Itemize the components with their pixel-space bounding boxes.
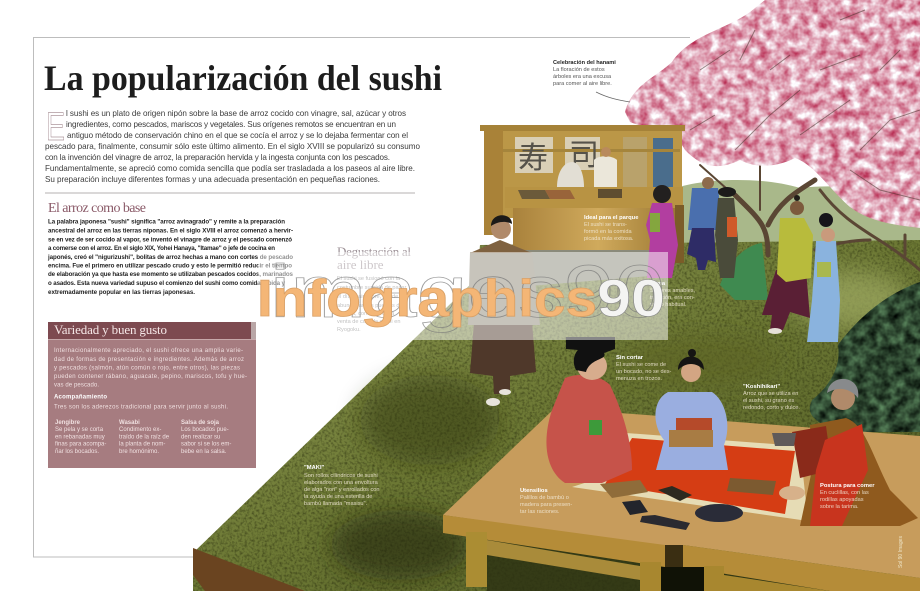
cherry blossom canopy bbox=[625, 0, 920, 228]
callout: Sin cortar bbox=[616, 355, 671, 382]
section: Degustación al aire libre: abundaban los puestos de bbox=[337, 303, 403, 309]
figure: seated woman with grey hair bbox=[779, 379, 918, 526]
watermark white numerals: 90 bbox=[597, 270, 665, 328]
drop cap: E bbox=[46, 105, 65, 149]
watermark orange text: Infographics bbox=[257, 270, 597, 328]
callout: Ideal para el parque: Ideal para el parque bbox=[584, 215, 639, 221]
callout: Maki: elaborados con una envoltura bbox=[304, 480, 379, 486]
intro text block: antiguo método de conservación chino en el que se cocía el arroz y se lo dejaba fermentar con el bbox=[67, 131, 408, 140]
credit: Sol 90 Images bbox=[898, 536, 904, 568]
figure: woman in magenta kimono bbox=[646, 185, 678, 278]
hills bbox=[670, 180, 920, 270]
column: Salsa de soja: bebe en la salsa. bbox=[181, 449, 227, 455]
column: Wasabi: Condimento ex- bbox=[119, 427, 161, 433]
callout: hanami bbox=[553, 60, 630, 102]
panel header bbox=[48, 322, 251, 339]
deck top bbox=[443, 408, 920, 578]
watermark band bbox=[257, 250, 668, 340]
column: Jengibre: Se pela y se corta bbox=[55, 427, 104, 433]
callout: Ideal para el parque: El sushi se trans- bbox=[584, 222, 627, 228]
panel heading: Variedad y buen gusto bbox=[54, 322, 167, 337]
figure: woman in light blue kimono bbox=[807, 213, 840, 342]
callout: Maki: de alga "nori" y enrollados con bbox=[304, 487, 380, 493]
callout: Maki: "MAKI" bbox=[304, 465, 325, 471]
section: Degustación al aire libre: el día al aire libre, donde bbox=[337, 294, 398, 300]
column: Salsa de soja: den realizar su bbox=[181, 434, 220, 440]
callout: Maki bbox=[304, 465, 380, 507]
figure: standing man bbox=[468, 215, 540, 406]
section text: La palabra japonesa "sushi" significa "arroz avinagrado" y remite a la preparación bbox=[48, 218, 285, 226]
page frame bbox=[34, 38, 690, 557]
panel text: Internacionalmente apreciado, el sushi ofrece una amplia varie- bbox=[54, 348, 243, 354]
garden plants bbox=[720, 243, 768, 300]
callout: Koshihikari: "Koshihikari" bbox=[743, 384, 780, 390]
callout: Sin cortar: Sin cortar bbox=[616, 355, 644, 361]
callout: Postura para comer: rodillas apoyadas bbox=[820, 497, 864, 503]
deck joint bbox=[665, 545, 683, 567]
intro text block: pescado para, finalmente, consumir sólo este último alimento. En el siglo XVIII se popularizó su consumo bbox=[45, 142, 420, 151]
column: Salsa de soja bbox=[181, 420, 231, 455]
section text: o asados. Esta nueva variedad supuso el comienzo del sushi como comida rápida y bbox=[48, 280, 286, 287]
callout: Ideal para el parque: formó en la comida bbox=[584, 229, 632, 235]
callout: Postura para comer: sobre la tarima. bbox=[820, 504, 859, 510]
callout: Utensilios: madera para presen- bbox=[520, 502, 572, 508]
callout: Postura para comer: En cuclillas, con las bbox=[820, 490, 869, 496]
panel: Variedad y buen gusto bbox=[48, 322, 256, 468]
callout: Koshihikari: el sushi, su grano es bbox=[743, 398, 795, 404]
callout: Maki: la ayuda de una esterilla de bbox=[304, 494, 372, 500]
legs and beams bbox=[487, 540, 640, 580]
red mat bbox=[572, 433, 808, 521]
callout: Ideal para el parque: picada más exitosa. bbox=[584, 236, 634, 242]
canopy branches bbox=[690, 10, 920, 200]
section text: se en vez de ser cocido al vapor, se inventó el vinagre de arroz y el pescado comenzó bbox=[48, 236, 292, 244]
figure: woman in dark kimono bbox=[715, 187, 738, 278]
ground bbox=[193, 240, 920, 591]
callout: Koshihikari: redondo, corto y dulce. bbox=[743, 405, 800, 411]
callout: Utensilios: Utensilios bbox=[520, 488, 548, 494]
food stall: 司 bbox=[569, 139, 599, 172]
column: Salsa de soja: Los bocados pue- bbox=[181, 427, 229, 433]
tatami platform bbox=[443, 408, 920, 591]
ground shading bbox=[330, 270, 910, 580]
stall cooks bbox=[557, 162, 584, 187]
under-deck shadow bbox=[487, 535, 920, 591]
section: Degustación al aire libre: aire libre bbox=[337, 257, 384, 272]
callout: hanami: árboles era una excusa bbox=[553, 74, 612, 80]
panel text: pueden contener rábano, aguacate, pepino, mariscos, tofu y hue- bbox=[54, 374, 247, 380]
section text: extremadamente popular en las tierras japonesas. bbox=[48, 289, 195, 296]
intro text block: con la invención del vinagre de arroz, la preparación hervida y la ingesta conjunta con los pescados. bbox=[45, 153, 390, 162]
callout: hanami: Celebración del hanami bbox=[553, 60, 616, 66]
panel text: vas de pescado. bbox=[54, 382, 99, 388]
cherry tree trunks bbox=[700, 165, 920, 270]
callout: Maki: bambú llamada "masisu". bbox=[304, 501, 367, 507]
panel text: Tres son los aderezos tradicional para servir junto al sushi. bbox=[54, 404, 228, 410]
sign panels bbox=[515, 137, 553, 173]
path below stall bbox=[510, 250, 668, 286]
column: Wasabi: bre homónimo. bbox=[119, 449, 159, 455]
panel text: Acompañamiento bbox=[54, 394, 107, 400]
intro text block: Su preparación incluye diferentes formas y una adecuada presentación en pequeñas raciones. bbox=[45, 175, 380, 184]
right foreground plants bbox=[810, 282, 920, 432]
section: Degustación al aire libre: venta de comida sushi en bbox=[337, 319, 400, 325]
column: Jengibre bbox=[55, 420, 106, 455]
intro text block: l sushi es un plato de origen nipón sobre la base de arroz cocido con vinagre, sal, azúcar y otros bbox=[66, 109, 406, 118]
callout: Utensilios bbox=[520, 488, 572, 515]
column: Jengibre: finas para acompa- bbox=[55, 442, 106, 448]
callout: habit text beside the lawn: sumo habitual. bbox=[650, 302, 687, 308]
section text: japonés, creó el "nigurizushi", bolitas de arroz hechas a mano con cortes de pescado bbox=[47, 254, 293, 261]
section text bbox=[47, 218, 294, 296]
panel text bbox=[54, 348, 247, 410]
figure: seated woman in blue kimono bbox=[655, 349, 728, 470]
callout: hanami: La floración de estos bbox=[553, 67, 605, 73]
column: Salsa de soja: Salsa de soja bbox=[181, 420, 220, 426]
callout: habit text beside the lawn: Sabores amables, bbox=[650, 288, 696, 294]
callout: hanami: para comer al aire libre. bbox=[553, 81, 612, 87]
callout: habit text beside the lawn: Fama bbox=[650, 281, 666, 287]
watermark outline text: images90 bbox=[270, 250, 665, 333]
column: Wasabi: Wasabi bbox=[119, 420, 140, 426]
figure: man in yellow coat bbox=[762, 195, 813, 334]
section: Degustación al aire libre: Degustación al bbox=[337, 244, 411, 259]
callout: Sin cortar: un bocado, no se des- bbox=[616, 369, 671, 375]
section: Degustación al aire libre: El sushi se fusionó con la bbox=[337, 276, 401, 282]
sushi trays and utensils bbox=[600, 433, 796, 530]
callout: habit text beside the lawn bbox=[650, 281, 696, 308]
callout: Postura para comer bbox=[820, 483, 875, 510]
callout: Ideal para el parque bbox=[584, 215, 639, 242]
food stall bbox=[480, 125, 685, 263]
section heading: El arroz como base: El arroz como base bbox=[48, 201, 146, 216]
column: Jengibre: Jengibre bbox=[55, 420, 81, 426]
deck front boards bbox=[443, 515, 665, 567]
callout: habit text beside the lawn: tradición, era con- bbox=[650, 295, 695, 301]
callout: Sin cortar: menuza en trozos. bbox=[616, 376, 662, 382]
callout: Utensilios: tar las raciones. bbox=[520, 509, 560, 515]
intro text block: ingredientes, como pescados, mariscos y vegetales. Sus orígenes remotos se encuentran en un bbox=[66, 120, 396, 129]
callout: Koshihikari bbox=[743, 384, 800, 411]
panel text: y pescados (salmón, atún común o rojo, entre otros), las piezas bbox=[54, 366, 240, 372]
callout: Sin cortar: El sushi se come de bbox=[616, 362, 666, 368]
section text: de elaboración ya que hasta ese momento se utilizaban pescados cocidos, marinados bbox=[48, 271, 294, 278]
stall counter bbox=[505, 187, 683, 208]
soil edge bbox=[193, 548, 305, 591]
figure: seated woman in red kimono bbox=[546, 337, 632, 483]
figures standing in the park bbox=[646, 177, 840, 342]
callout: Postura para comer: Postura para comer bbox=[820, 483, 875, 489]
column: Jengibre: ñar los bocados. bbox=[55, 449, 99, 455]
title: La popularización del sushi bbox=[44, 58, 442, 98]
section text: ancestral del arroz en las tierras niponas. En el siglo XVIII el arroz comenzó a hervir- bbox=[48, 228, 293, 234]
section: Degustación al aire libre: comida, como los de la bbox=[337, 311, 395, 317]
figure: man in blue jacket bbox=[687, 177, 723, 270]
column: Salsa de soja: sabor si se los em- bbox=[181, 442, 231, 448]
illustration: park scene bbox=[193, 0, 920, 591]
intro text block bbox=[45, 105, 420, 184]
column: Wasabi: la planta de nom- bbox=[119, 442, 165, 448]
section: Degustación al aire libre: costumbre surgida de pasar bbox=[337, 285, 406, 291]
column: Jengibre: en rebanadas muy bbox=[55, 434, 105, 440]
kanji sign: 寿 bbox=[518, 142, 548, 175]
section text: encima. Fue el primero en utilizar pescado crudo y esto le permitió reducir el tiempo bbox=[48, 262, 292, 270]
panel text: dad de formas de presentación e ingredientes. Además de arroz bbox=[54, 357, 244, 363]
column: Wasabi: traído de la raíz de bbox=[119, 434, 170, 440]
column: Wasabi bbox=[119, 420, 170, 455]
callout: Utensilios: Palillos de bambú o bbox=[520, 495, 569, 501]
section: Degustación al aire libre: Ryogoku. bbox=[337, 327, 361, 333]
section: Degustación al aire libre bbox=[337, 244, 411, 333]
intro text block: Fundamentalmente, se apreció como comida sencilla que podía ser trasladada a los paseos al aire libre. bbox=[45, 164, 415, 173]
section text: a comerse con el arroz. En el siglo XIX, Yohei Hanaya, "Itamae" o jefe de cocina en bbox=[48, 245, 275, 252]
callout: Koshihikari: Arroz que se utiliza en bbox=[743, 391, 798, 397]
callout: Maki: Son rollos cilíndricos de sushi bbox=[304, 473, 378, 479]
